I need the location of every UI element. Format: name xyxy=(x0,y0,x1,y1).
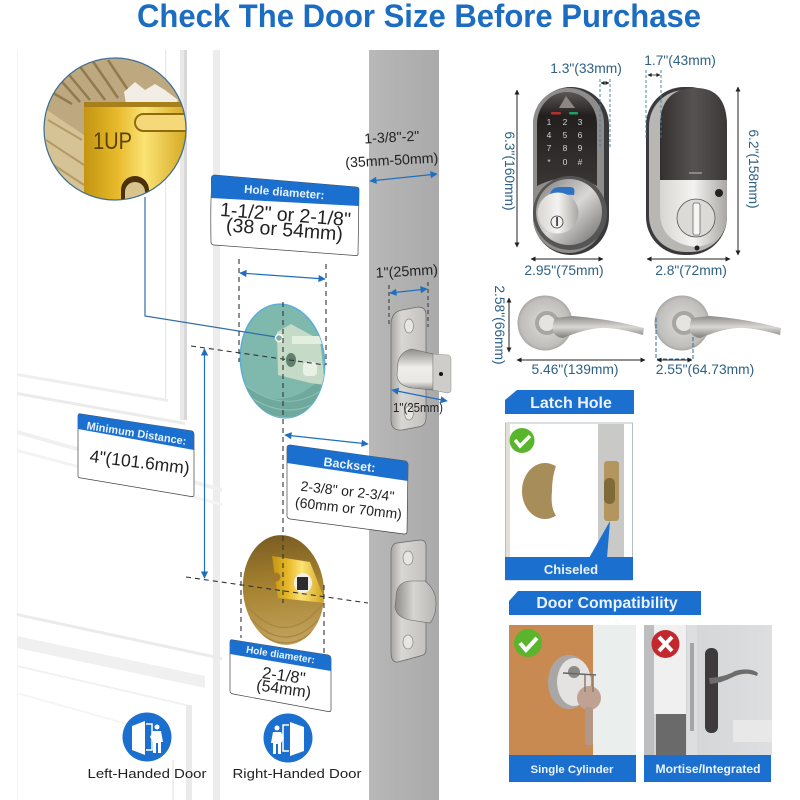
deadbolt and key xyxy=(548,655,601,745)
arrow: door thickness xyxy=(370,174,437,181)
icon: right-handed door xyxy=(264,714,312,762)
icon: green check xyxy=(510,428,534,453)
keypad digits: 4 xyxy=(547,130,552,140)
icon: red x xyxy=(652,630,680,658)
pointer xyxy=(589,521,610,558)
keypad digits: # xyxy=(578,157,583,167)
deadbolt dimension top: 1"(25mm) xyxy=(375,262,438,282)
label: hole diameter bottom: (54mm) xyxy=(255,677,312,702)
keypad digits xyxy=(547,117,583,167)
heading: latch hole xyxy=(505,390,634,414)
wood bore hole xyxy=(522,463,569,519)
caption: right-handed door: Right-Handed Door xyxy=(232,766,362,781)
panel: single cylinder xyxy=(509,625,636,782)
deadbolt dimension bottom xyxy=(392,390,447,415)
label: hole diameter top xyxy=(211,175,359,256)
text: door thickness xyxy=(345,129,439,171)
guide lines for holes xyxy=(186,259,368,655)
dimensions: back lock: 2.8"(72mm) xyxy=(655,263,727,278)
icon: left-handed door xyxy=(122,712,172,762)
callout line from magnifier to hole xyxy=(145,197,276,337)
magnified latch hole xyxy=(44,58,195,202)
lever handle left xyxy=(518,296,644,350)
label: hole diameter top: 1-1/2" or 2-1/8" xyxy=(219,199,352,231)
gold latch hole circle xyxy=(242,535,324,645)
mortise handle xyxy=(705,648,758,733)
caption: chiseled xyxy=(505,557,633,580)
label: backset: 2-3/8" or 2-3/4" xyxy=(300,478,395,504)
label: backset: (60mm or 70mm) xyxy=(294,494,403,522)
dimensions: levers: 2.55"(64.73mm) xyxy=(656,362,754,377)
heading: latch hole: Latch Hole xyxy=(530,395,612,412)
label: hole diameter top: (38 or 54mm) xyxy=(225,214,344,246)
deadbolt dimension bottom: 1"(25mm) xyxy=(393,401,443,415)
text: door thickness: 1-3/8"-2" xyxy=(364,129,420,147)
caption: mortise integrated xyxy=(644,755,771,782)
blue hole diameter circle xyxy=(240,303,326,419)
keypad digits: 8 xyxy=(563,143,568,153)
label: backset xyxy=(287,445,408,534)
arrow: minimum distance xyxy=(204,349,206,578)
chiseled mortise xyxy=(604,461,619,521)
dimensions: back lock: 6.2"(158mm) xyxy=(746,129,761,209)
keypad digits: 7 xyxy=(547,143,552,153)
keypad digits: 6 xyxy=(578,130,583,140)
keypad digits: 0 xyxy=(563,157,568,167)
panel: latch hole photo xyxy=(505,423,633,580)
heading: door compatibility xyxy=(509,591,701,615)
engraved mark: 1UP xyxy=(93,128,132,155)
dimensions: levers xyxy=(492,285,754,377)
callout dot xyxy=(276,334,282,342)
keypad digits: 9 xyxy=(578,143,583,153)
dimensions: back lock: 1.7"(43mm) xyxy=(644,53,716,68)
caption: chiseled: Chiseled xyxy=(544,562,598,577)
back lock xyxy=(646,87,727,255)
label: minimum distance: Minimum Distance: xyxy=(86,420,187,448)
label: minimum distance xyxy=(78,414,194,497)
arrow: top hole diameter xyxy=(240,273,325,279)
door illustration xyxy=(17,50,369,800)
panel: mortise integrated xyxy=(644,625,772,782)
lever handle right xyxy=(654,296,781,359)
label: hole diameter bottom: Hole diameter: xyxy=(245,645,316,666)
label: minimum distance: 4"(101.6mm) xyxy=(89,446,191,478)
deadbolt dimension top xyxy=(375,262,438,327)
dimensions: back lock xyxy=(644,53,761,278)
dimensions: front lock: 2.95"(75mm) xyxy=(524,263,604,278)
label: hole diameter bottom xyxy=(230,640,331,712)
label: backset: Backset: xyxy=(323,455,376,475)
deadbolt faceplate on door edge xyxy=(391,307,451,430)
arrow: backset xyxy=(285,435,368,444)
keypad digits: 1 xyxy=(547,117,552,127)
keypad digits: 3 xyxy=(578,117,583,127)
dimensions: front lock: 6.3"(160mm) xyxy=(502,131,517,211)
caption: single cylinder: Single Cylinder xyxy=(531,764,614,776)
dimensions: levers: 2.58"(66mm) xyxy=(492,285,507,365)
caption: single cylinder xyxy=(509,755,636,782)
keypad digits: 5 xyxy=(563,130,568,140)
latch faceplate on door edge xyxy=(391,540,436,662)
door edge xyxy=(369,50,439,800)
label: hole diameter bottom: 2-1/8" xyxy=(261,664,307,688)
dimensions: levers: 5.46"(139mm) xyxy=(532,362,618,377)
dimensions: front lock xyxy=(502,61,622,278)
label: hole diameter top: Hole diameter: xyxy=(244,183,325,202)
heading: door compatibility: Door Compatibility xyxy=(536,595,678,612)
icon: green check xyxy=(514,629,542,657)
keypad digits: 2 xyxy=(563,117,568,127)
caption: mortise integrated: Mortise/Integrated xyxy=(656,762,760,776)
front keypad lock xyxy=(533,87,609,255)
dimensions: front lock: 1.3"(33mm) xyxy=(550,61,622,76)
text: door thickness: (35mm-50mm) xyxy=(345,151,439,171)
keypad digits: * xyxy=(547,157,551,167)
caption: left-handed door: Left-Handed Door xyxy=(88,766,207,781)
